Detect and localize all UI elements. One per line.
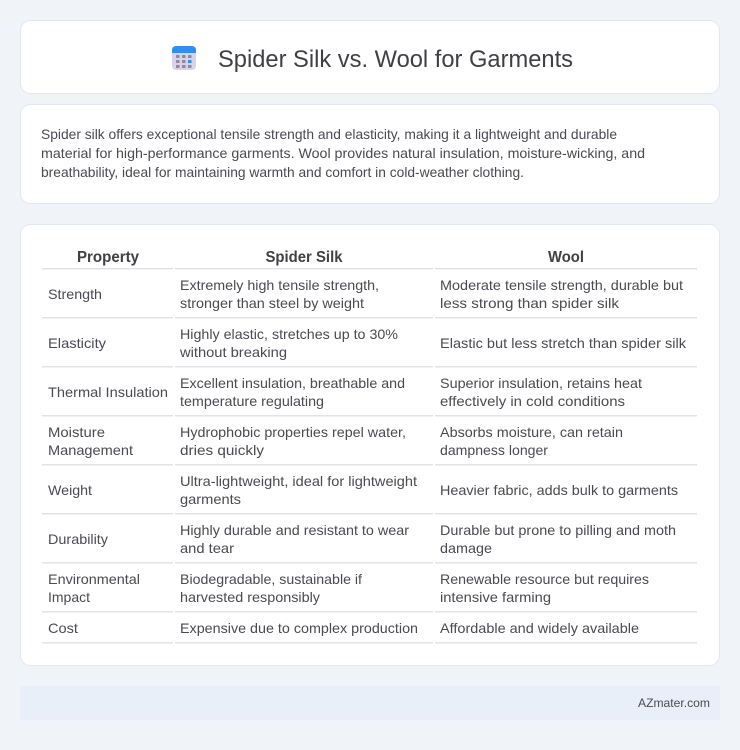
- row: thermal insulation: temperature regulating: [180, 393, 324, 409]
- row: environmental impact: [48, 571, 649, 605]
- row: durability: [48, 522, 676, 556]
- row: thermal insulation: effectively in cold conditions: [440, 393, 625, 409]
- text block: introduction: material for high-performance garments. Wool provides natural insulation, moisture-wicking, and: [41, 145, 645, 161]
- row: strength: stronger than steel by weight: [180, 295, 364, 311]
- row: elasticity: without breaking: [179, 344, 287, 360]
- row: strength: Extremely high tensile strength,: [180, 277, 379, 293]
- row: weight: [48, 473, 678, 507]
- footer: AZmater.com: [638, 696, 710, 710]
- text block: introduction: Spider silk offers exceptional tensile strength and elasticity, making it a lightweight and durable: [41, 126, 617, 142]
- row: thermal insulation: Superior insulation, retains heat: [440, 375, 642, 391]
- panel: comparison table: [20, 224, 720, 666]
- row: strength: Moderate tensile strength, durable but: [440, 277, 683, 293]
- row: durability: Durability: [48, 531, 108, 547]
- row: moisture management: Hydrophobic properties repel water,: [180, 424, 406, 440]
- row: weight: garments: [180, 491, 241, 507]
- row: thermal insulation: [48, 375, 642, 409]
- row: moisture management: dries quickly: [180, 442, 264, 458]
- table header: Spider Silk: [266, 249, 343, 266]
- row: durability: damage: [440, 540, 492, 556]
- text block: introduction: [41, 126, 645, 180]
- row: weight: Heavier fabric, adds bulk to garments: [440, 482, 678, 498]
- row: weight: Ultra-lightweight, ideal for lightweight: [180, 473, 417, 489]
- row: thermal insulation: Excellent insulation, breathable and: [180, 375, 405, 391]
- table header: [77, 249, 584, 266]
- row: moisture management: [48, 424, 623, 458]
- row: durability: and tear: [180, 540, 234, 556]
- row: moisture management: Management: [48, 442, 133, 458]
- table header: Property: [77, 249, 139, 266]
- row: moisture management: Moisture: [48, 424, 105, 440]
- row: environmental impact: harvested responsibly: [180, 589, 320, 605]
- row: environmental impact: intensive farming: [440, 589, 551, 605]
- row: cost: Cost: [48, 620, 78, 636]
- row: cost: [48, 620, 639, 636]
- row: environmental impact: Biodegradable, sustainable if: [180, 571, 362, 587]
- row: elasticity: Elastic but less stretch than spider silk: [440, 335, 687, 351]
- panel: title card: [20, 20, 720, 94]
- icon: calendar: [172, 46, 196, 70]
- row: cost: Expensive due to complex production: [180, 620, 418, 636]
- row: thermal insulation: Thermal Insulation: [48, 384, 168, 400]
- text block: introduction: breathability, ideal for maintaining warmth and comfort in cold-weather clothing.: [41, 164, 524, 180]
- row: weight: Weight: [48, 482, 92, 498]
- row: durability: Highly durable and resistant to wear: [180, 522, 409, 538]
- row: strength: less strong than spider silk: [440, 295, 620, 311]
- row: moisture management: Absorbs moisture, can retain: [440, 424, 623, 440]
- row: elasticity: Elasticity: [48, 335, 106, 351]
- row: environmental impact: Renewable resource but requires: [440, 571, 649, 587]
- row: cost: Affordable and widely available: [440, 620, 639, 636]
- panel: introduction: [20, 104, 720, 204]
- row: durability: Durable but prone to pilling and moth: [440, 522, 676, 538]
- table header: Wool: [548, 249, 584, 266]
- row: environmental impact: Environmental: [48, 571, 140, 587]
- row: strength: Strength: [48, 286, 102, 302]
- row: elasticity: Highly elastic, stretches up to 30%: [180, 326, 398, 342]
- row: moisture management: dampness longer: [440, 442, 548, 458]
- footer: [20, 686, 720, 720]
- row: elasticity: [48, 326, 687, 360]
- row: environmental impact: Impact: [48, 589, 90, 605]
- title: Spider Silk vs. Wool for Garments: [218, 46, 573, 73]
- row: strength: [48, 277, 683, 311]
